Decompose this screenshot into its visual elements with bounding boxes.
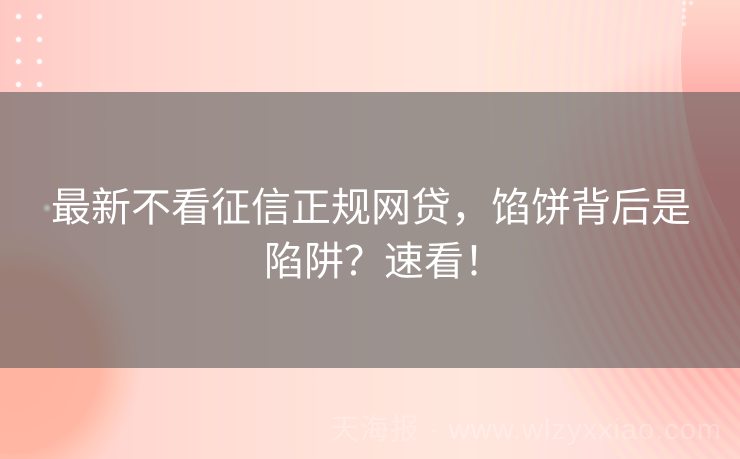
small speck beside title [44,205,50,211]
corner disc: top right [681,0,740,238]
dark translucent band [0,92,740,368]
title: 陷阱？速看！ [264,240,504,284]
title: 最新不看征信正规网贷，馅饼背后是 [51,186,691,230]
watermark: 天海报 · www.wlzyxxiao.com [330,414,722,446]
title [51,186,691,284]
dot grid: top right [682,1,693,26]
dot grid: top left [16,14,42,88]
concentric arcs [605,87,740,441]
